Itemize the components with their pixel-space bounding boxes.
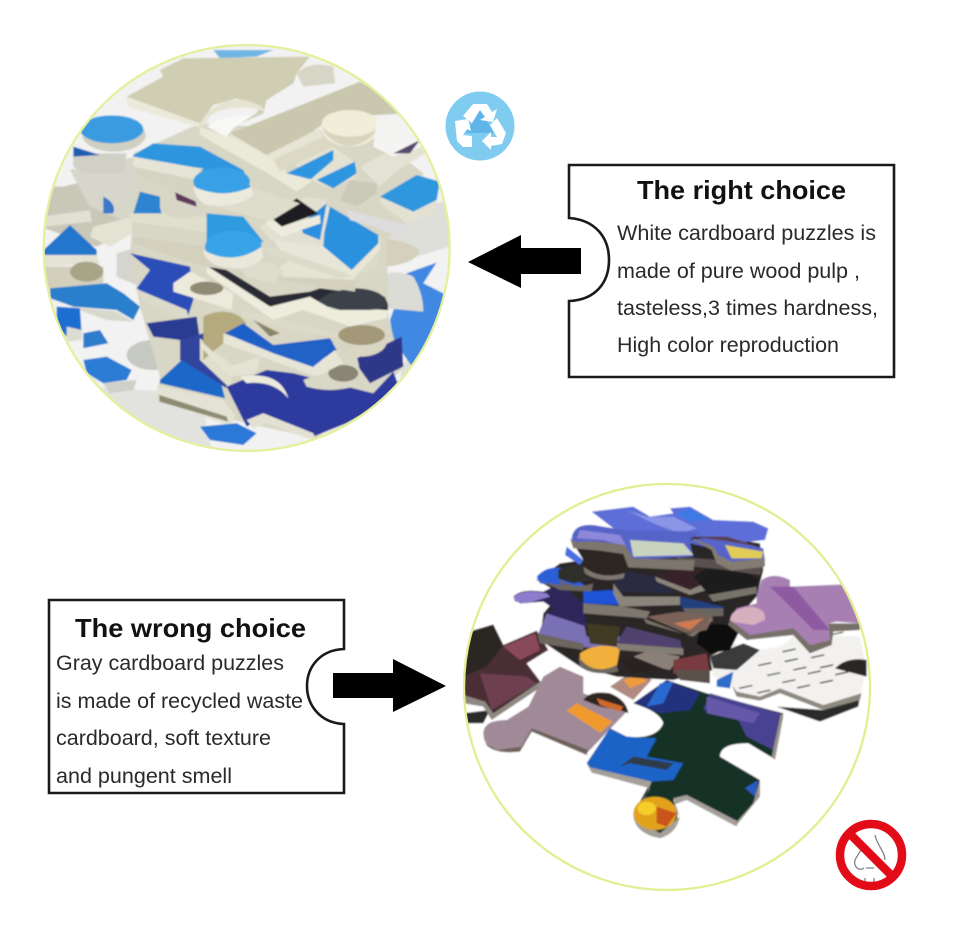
stack backing [537,523,763,680]
stack base [538,613,620,650]
heading: The right choice [637,175,846,205]
arrow: pointing right [333,659,446,712]
top pieces [592,507,768,543]
stack upper pieces [536,566,585,587]
mauve piece with orange [483,667,628,752]
body text [617,222,878,357]
icon: recycle symbol [446,92,514,160]
panel: the wrong choice [49,600,344,793]
body text: is made of recycled waste [56,690,303,713]
right blue piece [380,175,440,213]
white piece [710,633,865,707]
top beige pieces [213,50,273,58]
body text [56,652,303,788]
blue pieces with cream sides [131,213,206,231]
callout box with notch [569,165,894,377]
body text: High color reproduction [617,334,839,357]
body text: tasteless,3 times hardness, [617,297,878,320]
body text: White cardboard puzzles is [617,222,876,245]
background blue piece right [389,262,444,366]
dark middle pieces [173,272,233,310]
background left cluster [46,182,122,247]
pink purple piece [730,576,860,645]
body text: Gray cardboard puzzles [56,652,284,675]
background grey floor [102,388,210,446]
body text: cardboard, soft texture [56,727,271,750]
panel: the right choice [569,165,894,377]
body text: and pungent smell [56,765,232,788]
arrow: pointing left [468,235,581,288]
body text: made of pure wood pulp , [617,260,860,283]
left dark piece [463,624,548,718]
icon: no smell sign [840,824,902,886]
photo: white cardboard puzzle stack [40,40,460,460]
shadows [463,697,860,723]
central stack backing [130,123,423,438]
photo: gray cardboard puzzle pile [460,480,880,900]
nose sketch [855,835,885,883]
main dark green piece [587,680,783,837]
callout box with notch [49,600,344,793]
heading: The wrong choice [75,613,306,643]
lower blue and purple pieces [130,253,193,320]
